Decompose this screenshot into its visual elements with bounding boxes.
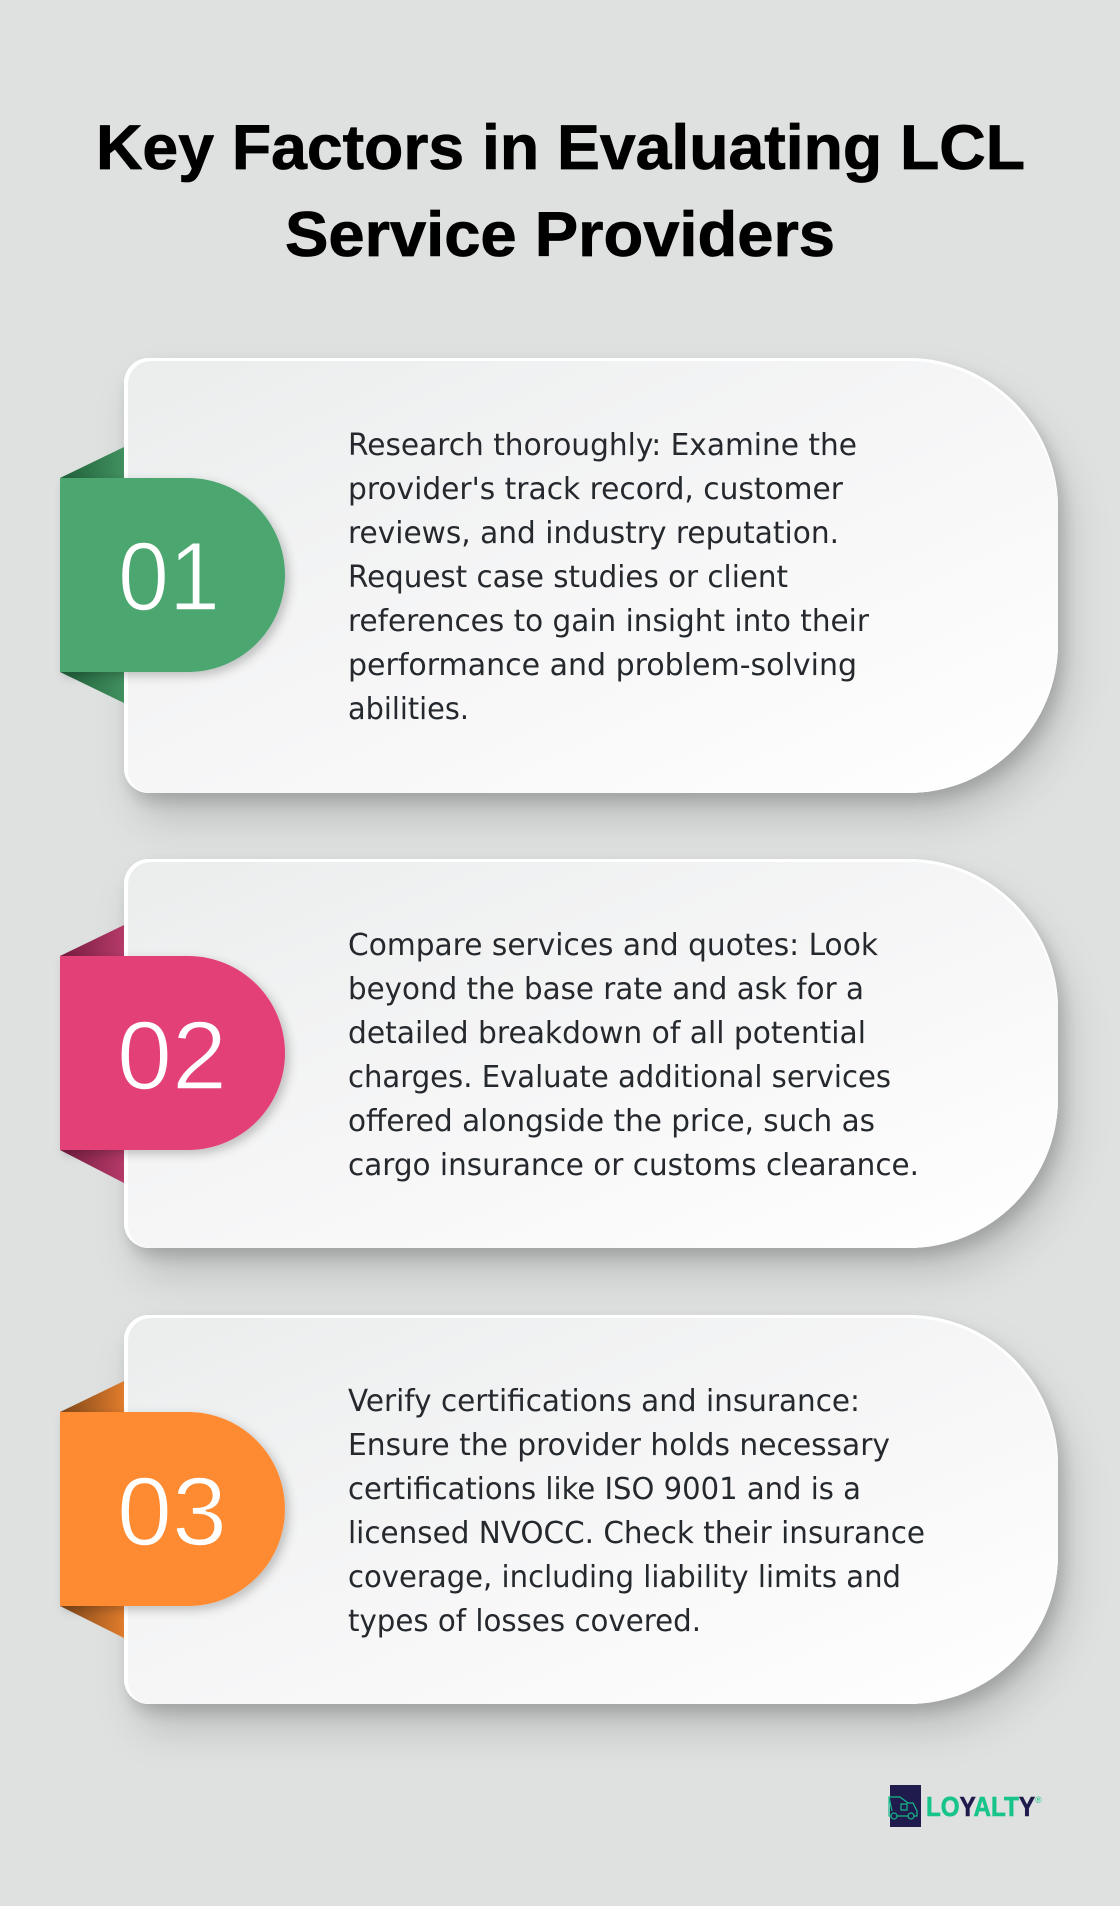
title: Key Factors in Evaluating LCL	[96, 113, 1025, 183]
number badge 02: 02	[117, 1001, 227, 1110]
text: step 02: Compare services and quotes: Look	[348, 928, 878, 963]
ribbon fold top 02	[60, 925, 124, 956]
text: step 01: provider's track record, customer	[348, 472, 843, 507]
text: step 03: certifications like ISO 9001 and is a	[348, 1472, 861, 1507]
ribbon fold bottom 03	[60, 1606, 124, 1638]
logo: Loyalty	[889, 1785, 1042, 1827]
text: step 01: Research thoroughly: Examine the	[348, 428, 857, 463]
registered mark: ®	[1035, 1795, 1042, 1805]
ribbon fold top 03	[60, 1381, 124, 1412]
icon: truck on navy square	[889, 1785, 921, 1827]
number badge 03	[60, 1412, 285, 1606]
text: step 01: reviews, and industry reputation.	[348, 516, 839, 551]
text: step 01: references to gain insight into their	[348, 604, 869, 639]
text: step 02: charges. Evaluate additional services	[348, 1060, 891, 1095]
number badge 01	[60, 478, 285, 672]
title: Service Providers	[285, 200, 835, 270]
wordmark: LOYALTY	[926, 1791, 1035, 1822]
text: step 02	[348, 928, 919, 1183]
text: step 03: coverage, including liability limits and	[348, 1560, 901, 1595]
ribbon fold top 01	[60, 447, 124, 478]
text: step 02: offered alongside the price, such as	[348, 1104, 875, 1139]
text: step 02: beyond the base rate and ask for a	[348, 972, 864, 1007]
text: step 01	[348, 428, 869, 727]
card 03	[124, 1315, 1058, 1704]
card 02	[124, 859, 1058, 1248]
text: step 03: Verify certifications and insurance:	[348, 1384, 860, 1419]
panel: step 03	[60, 1315, 1058, 1704]
panel: step 02	[60, 859, 1058, 1248]
text: step 03: licensed NVOCC. Check their insurance	[348, 1516, 925, 1551]
panel: step 01	[60, 358, 1058, 793]
text: step 03: types of losses covered.	[348, 1604, 701, 1639]
ribbon fold bottom 02	[60, 1150, 124, 1183]
title	[96, 113, 1025, 270]
number badge 01: 01	[118, 522, 220, 631]
text: step 01: Request case studies or client	[348, 560, 788, 595]
text: step 02: detailed breakdown of all potential	[348, 1016, 866, 1051]
text: step 03: Ensure the provider holds necessary	[348, 1428, 890, 1463]
number badge 03: 03	[117, 1457, 227, 1566]
number badge 02	[60, 956, 285, 1150]
ribbon fold bottom 01	[60, 672, 124, 703]
text: step 02: cargo insurance or customs clearance.	[348, 1148, 919, 1183]
text: step 01: performance and problem-solving	[348, 648, 857, 683]
card 01	[124, 358, 1058, 793]
text: step 01: abilities.	[348, 692, 469, 727]
text: step 03	[348, 1384, 925, 1639]
